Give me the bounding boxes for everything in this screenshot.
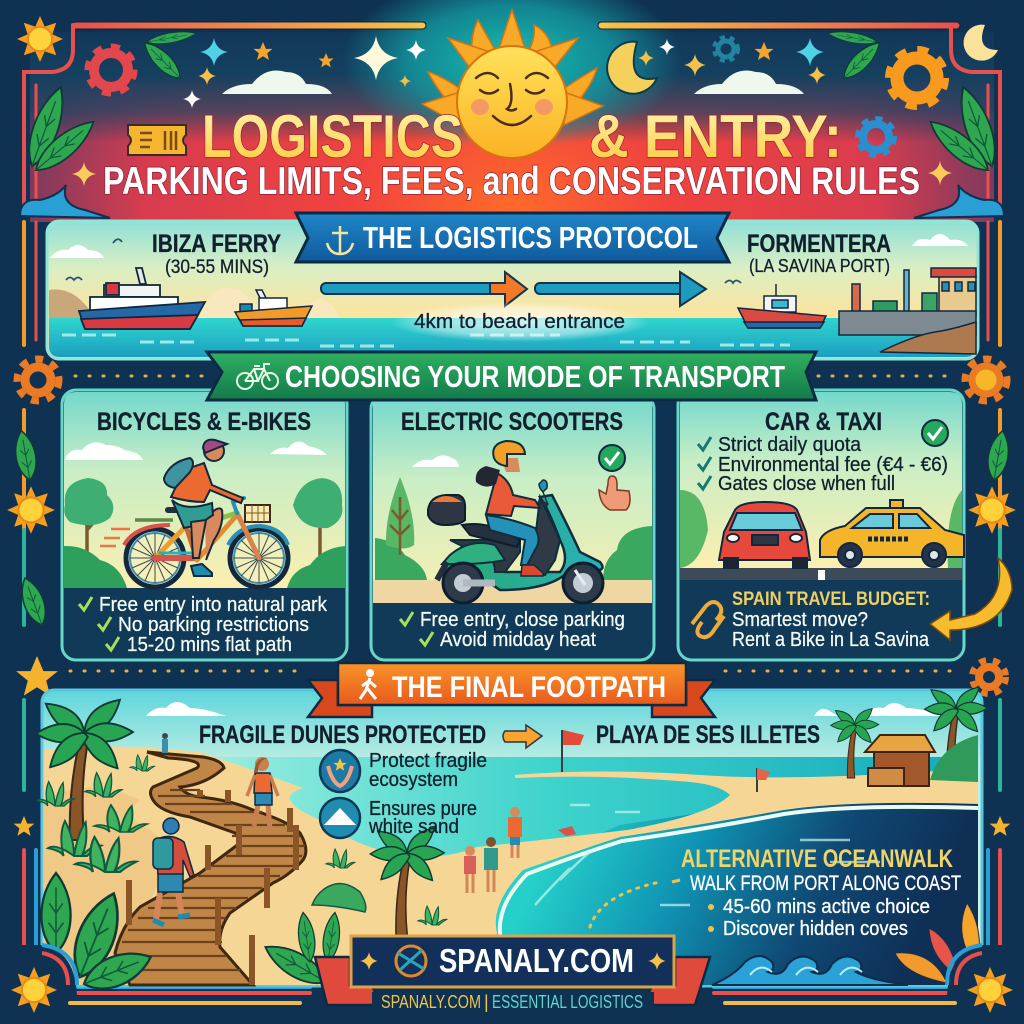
icon: check badge xyxy=(599,445,625,471)
icon: red flag xyxy=(562,730,584,772)
icon: small orange boat xyxy=(235,290,312,326)
icon: beach hut xyxy=(865,735,935,786)
text: ensures pure white sand: white sand xyxy=(368,816,459,838)
callout: alternative oceanwalk: Discover hidden coves xyxy=(723,918,908,940)
header panel xyxy=(30,0,994,222)
icon: ticket xyxy=(128,125,186,155)
icon: palm tree left xyxy=(36,692,134,840)
icon: arrival boat xyxy=(738,284,826,328)
icon: red car xyxy=(719,502,810,568)
checklist: 15-20 mins flat path xyxy=(127,634,292,656)
label: ferry duration: (30-55 MINS) xyxy=(165,257,269,278)
icon: logo globe xyxy=(396,946,426,976)
arrow: to the beach xyxy=(503,725,542,748)
heading: CAR & TAXI xyxy=(765,408,882,436)
heading: BICYCLES & E-BIKES xyxy=(97,408,311,436)
checklist: Free entry into natural park xyxy=(99,594,328,616)
callout: alternative oceanwalk: 45-60 mins active choice xyxy=(723,896,930,918)
icon: check badge xyxy=(922,420,948,446)
label: La Savina port: (LA SAVINA PORT) xyxy=(749,256,890,276)
icon: sun dunes xyxy=(44,788,168,985)
icon: protected ecosystem xyxy=(320,750,360,792)
icon: waves at header corners xyxy=(20,185,1004,218)
banner: the logistics protocol xyxy=(296,213,729,262)
sea xyxy=(49,318,976,357)
checklist: Avoid midday heat xyxy=(440,629,596,651)
checklist: No parking restrictions xyxy=(118,614,309,636)
icon: anchor xyxy=(327,226,353,254)
brand name: SPANALY.COM xyxy=(439,942,634,979)
sand xyxy=(44,746,978,985)
footer caption: | xyxy=(484,992,489,1012)
icon: chain link xyxy=(692,602,724,637)
text: playa de ses illetes: PLAYA DE SES ILLETES xyxy=(596,721,820,749)
icon: clouds xyxy=(65,441,327,460)
checklist xyxy=(79,594,328,656)
text: protect fragile ecosystem: ecosystem xyxy=(369,769,458,791)
icon: bicycle xyxy=(237,364,278,389)
icon: tree edges xyxy=(680,490,962,568)
icon: far bushes xyxy=(930,735,978,782)
text: protect fragile ecosystem xyxy=(369,750,487,791)
icons: corner suns and gears xyxy=(7,16,1016,836)
icon: autumn leaves xyxy=(895,903,980,983)
icon: shell xyxy=(558,826,576,836)
icon: moons xyxy=(607,25,998,94)
icon: ocean waves xyxy=(712,956,908,985)
icon: clouds xyxy=(50,234,968,258)
title: & ENTRY: xyxy=(589,103,842,170)
callout: alternative oceanwalk xyxy=(590,845,961,940)
icon: walkers xyxy=(153,733,522,925)
icon: speed lines xyxy=(100,529,130,546)
heading: THE FINAL FOOTPATH xyxy=(392,671,666,704)
arrow: Ibiza to Formentera xyxy=(321,272,706,306)
icons: header stars and sparkles xyxy=(72,36,952,186)
label: Formentera: FORMENTERA xyxy=(747,230,891,258)
icon: sea ripples xyxy=(535,805,880,905)
panel: electric scooters xyxy=(371,395,654,660)
icon: ferry xyxy=(79,268,205,329)
banner: choosing your mode of transport xyxy=(207,352,816,400)
footer caption xyxy=(372,992,654,1012)
panel: logistics protocol xyxy=(47,221,978,359)
icon: shrub xyxy=(312,884,366,912)
icon: tree and bushes xyxy=(375,477,652,580)
lagoon and sea xyxy=(200,757,978,872)
icon: birds xyxy=(66,239,741,283)
icons: leaves xyxy=(12,29,1012,628)
footer logo banner xyxy=(315,936,710,1005)
footer caption: SPANALY.COM xyxy=(381,992,481,1012)
text: fragile dunes protected: FRAGILE DUNES PROTECTED xyxy=(199,721,486,749)
title: LOGISTICS xyxy=(202,103,463,170)
text: ensures pure white sand: Ensures pure xyxy=(369,798,477,820)
icon: scooter rider xyxy=(428,441,603,603)
main ocean xyxy=(490,800,978,985)
icon: sparkle right xyxy=(648,952,666,970)
dotted route arrow xyxy=(590,882,660,927)
heading: ELECTRIC SCOOTERS xyxy=(401,408,623,436)
icon: boardwalk xyxy=(115,752,306,985)
icon: trees and bushes xyxy=(64,478,345,588)
icon: pointing hand xyxy=(599,476,630,510)
icon: white sea ripples xyxy=(62,335,790,346)
glow behind label xyxy=(390,302,650,342)
title xyxy=(202,103,842,170)
icon: background hills xyxy=(49,289,95,318)
icon: yellow taxi xyxy=(820,500,964,567)
text: protect fragile ecosystem: Protect fragile xyxy=(369,750,487,772)
callout: alternative oceanwalk: ALTERNATIVE OCEANWALK xyxy=(681,845,953,873)
banner: the final footpath xyxy=(308,663,715,717)
icon: clouds xyxy=(146,702,950,716)
ground xyxy=(373,580,652,603)
road xyxy=(680,568,962,580)
icon: white sand xyxy=(320,798,360,838)
panel: car and taxi xyxy=(678,390,1012,660)
text: ensures pure white sand xyxy=(368,798,477,838)
icon: small flag on beach xyxy=(757,768,770,792)
heading: CHOOSING YOUR MODE OF TRANSPORT xyxy=(285,359,785,394)
text: Spain travel budget: Smartest move? xyxy=(732,609,868,631)
icon: walking person xyxy=(360,670,376,699)
icon: cloud xyxy=(412,455,459,467)
text: Spain travel budget: SPAIN TRAVEL BUDGET: xyxy=(732,589,930,610)
icon: clouds xyxy=(222,70,804,94)
icon: port xyxy=(839,268,976,354)
icon: palm trees right xyxy=(830,682,988,778)
footer caption: ESSENTIAL LOGISTICS xyxy=(492,992,643,1012)
checklist xyxy=(698,434,948,495)
icon: palm tree lower xyxy=(370,822,445,935)
checklist: Gates close when full xyxy=(718,473,895,495)
arrow: curved yellow xyxy=(930,558,1012,640)
checklist: Free entry, close parking xyxy=(420,609,625,631)
text: Spain travel budget: Rent a Bike in La Savina xyxy=(732,629,930,651)
label: Ibiza ferry: IBIZA FERRY xyxy=(152,230,281,258)
panel: the final footpath xyxy=(36,682,988,998)
icon: foreground leaves xyxy=(41,873,343,998)
panel: bicycles and e-bikes xyxy=(62,390,347,660)
checklist: Strict daily quota xyxy=(718,434,862,456)
heading: THE LOGISTICS PROTOCOL xyxy=(363,220,698,255)
text: Spain travel budget xyxy=(732,589,930,651)
icon: beach grass xyxy=(37,755,447,925)
icon: bottom left corner ornament xyxy=(11,945,77,1013)
checklist: Environmental fee (€4 - €6) xyxy=(718,454,948,476)
label: distance: 4km to beach entrance xyxy=(414,311,625,333)
icon: sparkle left xyxy=(360,952,378,970)
icon: cyclist xyxy=(124,440,288,587)
foam on shore xyxy=(500,807,978,940)
icon: pale clouds xyxy=(200,288,340,318)
checklist xyxy=(400,609,625,651)
icon: bottom right corner ornament xyxy=(947,945,1013,1013)
icon: sun xyxy=(422,10,603,158)
